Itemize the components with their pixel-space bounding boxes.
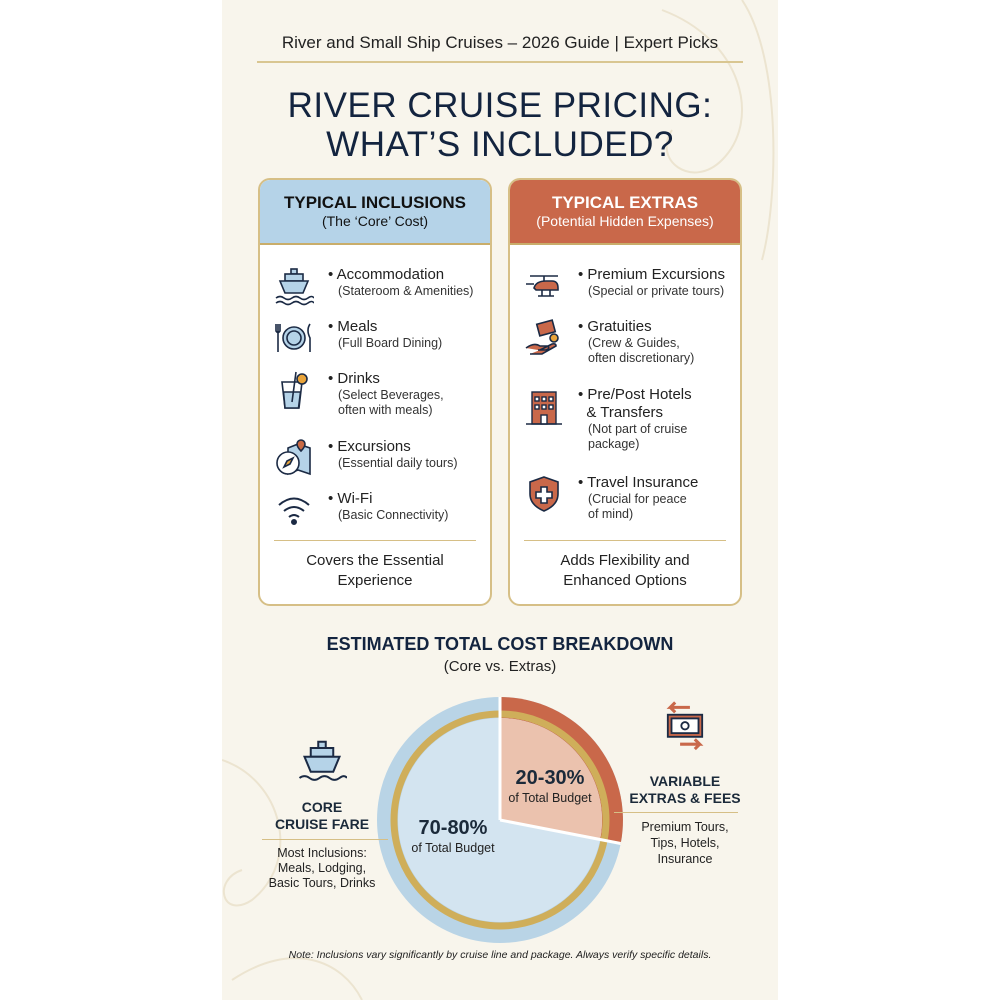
callout: variable extras: Premium Tours, [641,820,729,834]
pie chart [377,697,623,943]
extras footer: Enhanced Options [563,572,687,589]
breakdown heading: ESTIMATED TOTAL COST BREAKDOWN [327,634,673,654]
extras header [510,180,740,245]
item: hotels [526,386,692,451]
label: 70-80%: 70-80% [419,817,488,839]
icon: money exchange [666,701,704,750]
item: excursions [276,438,458,476]
panel: typical extras: • Travel Insurance [578,474,698,491]
panel: typical extras: package) [588,437,639,451]
extras header: (Potential Hidden Expenses) [536,213,714,229]
panel: typical inclusions: often with meals) [338,403,432,417]
extras footer: Adds Flexibility and [560,552,690,569]
label: 20-30%: 20-30% [516,767,585,789]
panel: typical inclusions: • Accommodation [328,266,444,283]
panel: typical extras: (Special or private tours) [588,284,724,298]
breakdown heading: (Core vs. Extras) [444,658,556,675]
callout: core cruise fare: CRUISE FARE [275,816,369,832]
panel: typical extras: • Gratuities [578,318,652,335]
breakdown heading [327,634,673,675]
callout: core cruise fare: CORE [302,799,342,815]
callout: variable extras: VARIABLE [650,773,720,789]
panel: typical extras [508,178,742,606]
callout: core cruise fare: Basic Tours, Drinks [269,876,375,890]
extras footer [524,540,726,591]
panel: typical extras: & Transfers [586,404,663,421]
panel: typical extras: (Crew & Guides, [588,336,680,350]
pie chart: of Total Budget [411,841,495,855]
callout: variable extras [614,701,741,866]
panel: typical inclusions: • Meals [328,318,377,335]
callout: core cruise fare: Meals, Lodging, [278,861,366,875]
icon: ship [299,740,347,781]
panel: typical inclusions: • Excursions [328,438,411,455]
note: Note: Inclusions vary significantly by cruise line and package. Always verify specific details. [289,949,711,961]
callout: core cruise fare: Most Inclusions: [277,846,367,860]
callout: core cruise fare [262,740,388,890]
decorative swirl background [222,0,774,1000]
panel: typical inclusions: • Wi-Fi [328,490,372,507]
item: drinks [281,370,444,417]
main title: WHAT’S INCLUDED? [326,125,674,164]
panel: typical inclusions: (Full Board Dining) [338,336,442,350]
inclusions footer [274,540,476,591]
panel: typical inclusions: (Basic Connectivity) [338,508,448,522]
callout: variable extras: EXTRAS & FEES [629,790,741,806]
panel: typical extras: • Pre/Post Hotels [578,386,692,403]
panel: typical extras: often discretionary) [588,351,694,365]
callout: variable extras: Insurance [658,852,712,866]
panel: typical inclusions: (Select Beverages, [338,388,444,402]
item: accommodation [276,266,473,306]
item: insurance [529,474,698,521]
panel: typical extras: (Crucial for peace [588,492,687,506]
callout: variable extras: Tips, Hotels, [650,836,720,850]
panel: typical extras: of mind) [588,507,633,521]
panel: typical inclusions: • Drinks [328,370,380,387]
inclusions footer: Covers the Essential [306,552,444,569]
pie chart: of Total Budget [508,791,592,805]
item: gratuities [526,318,694,365]
item: premium excursions [526,266,725,298]
extras header: TYPICAL EXTRAS [552,193,698,212]
top subtitle: River and Small Ship Cruises – 2026 Guide | Expert Picks [282,33,718,52]
inclusions header [260,180,490,245]
panel: typical extras: (Not part of cruise [588,422,687,436]
panel: typical inclusions [258,178,492,606]
inclusions footer: Experience [337,572,413,589]
panel: typical inclusions: (Stateroom & Amenities) [338,284,473,298]
item: meals [275,318,442,352]
item: wifi [278,490,448,525]
panel: typical extras: • Premium Excursions [578,266,725,283]
main title [288,86,712,164]
inclusions header: TYPICAL INCLUSIONS [284,193,466,212]
panel: typical inclusions: (Essential daily tours) [338,456,458,470]
inclusions header: (The ‘Core’ Cost) [322,213,428,229]
main title: RIVER CRUISE PRICING: [288,86,712,125]
